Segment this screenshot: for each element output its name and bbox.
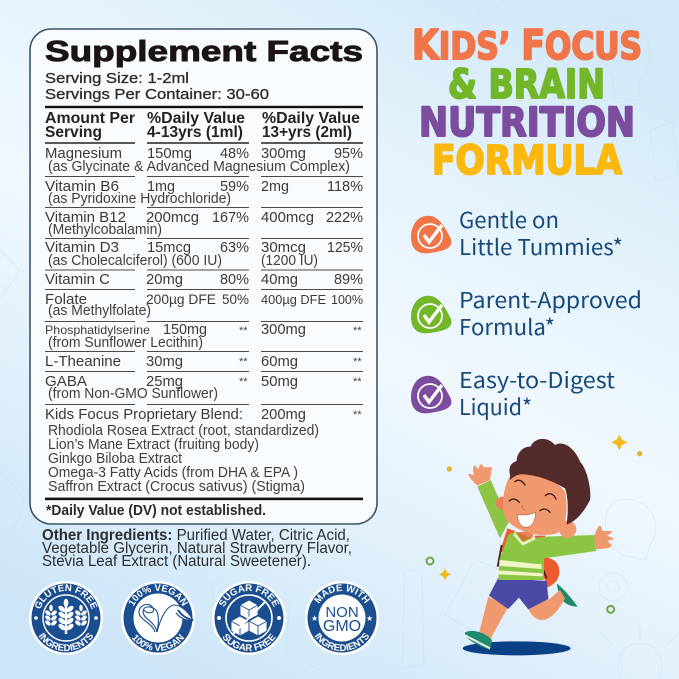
head	[496, 439, 590, 538]
badge: non gmo: ★	[366, 614, 373, 623]
row: vitamin d3: 125%	[327, 239, 363, 256]
proprietary blend: 200mg	[261, 406, 306, 423]
row: l-theanine: 60mg	[261, 353, 298, 370]
outstretched arm	[544, 526, 614, 558]
table header: 4-13yrs (1ml)	[147, 124, 243, 141]
row: gaba: **	[239, 376, 248, 388]
raised arm	[468, 464, 509, 538]
row: phosphatidylserine: 150mg	[163, 321, 207, 338]
serving info: Servings Per Container: 30-60	[45, 86, 269, 103]
row: vitamin b12: 200mcg	[146, 209, 199, 226]
row: vitamin d3: 63%	[220, 239, 249, 256]
icon: purple check	[411, 376, 451, 413]
row: l-theanine	[45, 353, 362, 370]
row: magnesium: 300mg	[261, 145, 306, 162]
row: vitamin b6	[45, 178, 363, 207]
row: vitamin b12: Vitamin B12	[45, 209, 126, 226]
other ingredients	[42, 527, 352, 570]
shorts	[489, 578, 548, 609]
row: vitamin b6: Vitamin B6	[45, 178, 119, 195]
proprietary blend: Lion’s Mane Extract (fruiting body)	[48, 437, 259, 453]
row: gaba: 25mg	[146, 373, 183, 390]
row: vitamin b6: 1mg	[147, 178, 175, 195]
badge: gluten free: INGREDIENTS	[38, 632, 93, 652]
row: vitamin b12	[45, 209, 363, 238]
badge: sugar free: SUGAR FREE	[219, 584, 280, 608]
row: phosphatidylserine: (from Sunflower Lecithin)	[48, 335, 203, 351]
icon: sugar cubes	[231, 600, 267, 636]
row: vitamin b6: (as Pyridoxine Hydrochloride)	[48, 191, 231, 207]
sparkles	[426, 434, 642, 613]
badge: vegan: 100% VEGAN	[128, 584, 188, 606]
title: KIDS’ FOCUS	[412, 21, 642, 69]
row: folate: 200µg DFE	[146, 291, 216, 307]
row: magnesium: Magnesium	[45, 145, 122, 162]
row: gaba: **	[353, 376, 362, 388]
panel: supplement facts	[30, 29, 377, 524]
hair	[509, 439, 590, 524]
title	[412, 21, 642, 184]
badge: non gmo: MADE WITH	[314, 584, 370, 604]
row: vitamin c: 20mg	[146, 271, 183, 288]
row: magnesium: 95%	[334, 145, 363, 162]
row: gaba: GABA	[45, 373, 87, 390]
title: FORMULA	[432, 138, 622, 184]
row: l-theanine: 30mg	[146, 353, 183, 370]
benefit: parent-approved formula: Parent-Approved	[459, 283, 642, 315]
row: vitamin d3: 30mcg	[261, 239, 306, 256]
proprietary blend: Rhodiola Rosea Extract (root, standardized)	[48, 423, 319, 439]
row: phosphatidylserine: 300mg	[261, 321, 306, 338]
row: folate	[45, 291, 363, 319]
benefit: gentle on little tummies: Little Tummies*	[459, 230, 623, 262]
heading: supplement facts: Supplement Facts	[45, 36, 363, 68]
row: folate: 50%	[222, 291, 249, 307]
row: gaba: 50mg	[261, 373, 298, 390]
non gmo label	[323, 604, 361, 635]
row: folate: (as Methylfolate)	[48, 303, 151, 319]
badge: non gmo	[305, 581, 379, 655]
proprietary blend: Kids Focus Proprietary Blend:	[45, 406, 243, 423]
row: magnesium	[45, 145, 363, 175]
row: vitamin b6: 118%	[327, 178, 363, 195]
title: NUTRITION	[419, 100, 635, 146]
row: vitamin d3: 15mcg	[147, 239, 191, 256]
badge: sugar free: SUGAR FREE	[222, 633, 276, 651]
backpack	[500, 528, 559, 587]
table header	[45, 110, 360, 141]
proprietary blend: Omega-3 Fatty Acids (from DHA & EPA )	[48, 465, 298, 481]
table header: Amount Per	[45, 110, 135, 127]
non gmo label: GMO	[323, 618, 361, 635]
row: vitamin b12: 167%	[212, 209, 249, 226]
row: gaba: (from Non-GMO Sunflower)	[48, 386, 218, 402]
proprietary blend: **	[353, 409, 362, 421]
badge: vegan	[121, 581, 195, 655]
proprietary blend: Saffron Extract (Crocus sativus) (Stigma)	[48, 479, 305, 495]
table header: %Daily Value	[262, 110, 360, 127]
row: vitamin b12: 222%	[326, 209, 363, 226]
badge: gluten free	[29, 581, 103, 655]
row: vitamin d3: (1200 IU)	[261, 253, 318, 269]
icon: vegan leaf v	[139, 604, 193, 632]
row: vitamin d3	[45, 239, 363, 269]
row: folate: 400µg DFE	[261, 292, 326, 307]
table header: %Daily Value	[147, 110, 245, 127]
row: vitamin c	[45, 271, 363, 288]
row: l-theanine: **	[239, 356, 248, 368]
row: l-theanine: **	[353, 356, 362, 368]
row: folate: 100%	[331, 292, 363, 307]
row: vitamin d3: (as Cholecalciferol) (600 IU)	[48, 253, 222, 269]
row: magnesium: 48%	[220, 145, 249, 162]
front leg and shoe	[464, 597, 508, 650]
table header: Serving	[45, 124, 102, 141]
serving info: Serving Size: 1-2ml	[45, 70, 189, 87]
face	[509, 480, 556, 512]
benefit: easy-to-digest liquid: Liquid*	[459, 390, 532, 422]
row: phosphatidylserine: **	[353, 325, 362, 337]
footnote: *Daily Value (DV) not established.	[46, 503, 266, 519]
row: phosphatidylserine: Phosphatidylserine	[45, 323, 150, 337]
benefit: easy-to-digest liquid	[411, 363, 615, 422]
row: gaba	[45, 373, 362, 402]
illustration: running boy	[426, 434, 642, 655]
row: magnesium: (as Glycinate & Advanced Magnesium Complex)	[48, 159, 350, 175]
badge: non gmo: ★	[311, 614, 318, 623]
non gmo label: NON	[325, 604, 359, 621]
serving info	[45, 70, 269, 103]
benefit: parent-approved formula: Formula*	[459, 310, 555, 342]
benefit: gentle on little tummies	[411, 203, 623, 262]
proprietary blend	[45, 406, 362, 495]
row: folate: Folate	[45, 291, 87, 308]
row: l-theanine: L-Theanine	[45, 353, 121, 370]
other ingredients: Other Ingredients: Purified Water, Citric Acid,	[42, 527, 350, 544]
icon: orange check	[411, 216, 451, 253]
benefit: easy-to-digest liquid: Easy-to-Digest	[459, 363, 615, 395]
table header: 13+yrs (2ml)	[262, 124, 352, 141]
row: vitamin b6: 2mg	[261, 178, 289, 195]
row: magnesium: 150mg	[147, 145, 192, 162]
other ingredients: Stevia Leaf Extract (Natural Sweetener).	[42, 553, 311, 570]
row: vitamin b6: 59%	[220, 178, 249, 195]
badge: gluten free: GLUTEN FREE	[35, 584, 98, 610]
row: phosphatidylserine	[45, 321, 362, 351]
row: vitamin c: 40mg	[261, 271, 298, 288]
benefit: parent-approved formula	[411, 283, 642, 342]
icon: wheat	[44, 598, 88, 634]
row: vitamin c: 80%	[220, 271, 249, 288]
torso	[498, 531, 545, 580]
row: vitamin c: 89%	[334, 271, 363, 288]
row: vitamin b12: (Methylcobalamin)	[48, 222, 162, 238]
row: vitamin b12: 400mcg	[261, 209, 314, 226]
proprietary blend: Ginkgo Biloba Extract	[48, 451, 182, 467]
other ingredients: Vegetable Glycerin, Natural Strawberry Flavor,	[42, 540, 352, 557]
title: & BRAIN	[448, 62, 605, 108]
badge: vegan: 100% VEGAN	[132, 634, 184, 651]
row: vitamin c: Vitamin C	[45, 271, 110, 288]
badge: sugar free	[212, 581, 286, 655]
benefit: gentle on little tummies: Gentle on	[459, 203, 559, 235]
icon: green check	[411, 296, 451, 333]
badge: non gmo: INGREDIENTS	[314, 632, 369, 652]
row: phosphatidylserine: **	[239, 325, 248, 337]
row: vitamin d3: Vitamin D3	[45, 239, 119, 256]
shadow	[463, 641, 571, 655]
back leg and shoe	[528, 583, 578, 620]
